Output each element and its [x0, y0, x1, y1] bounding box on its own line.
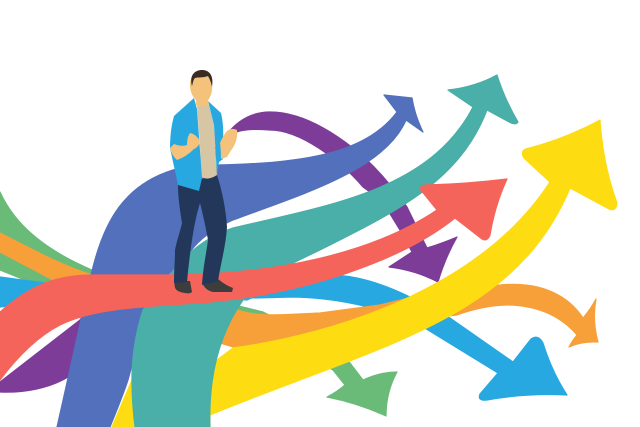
- person: [170, 70, 237, 293]
- head and neck: [190, 72, 212, 107]
- shirt: [170, 98, 223, 191]
- t-shirt: [197, 102, 217, 179]
- arrow: yellow: [112, 120, 617, 427]
- arrow: cyan: [0, 275, 567, 400]
- arrow: red: [0, 179, 507, 380]
- arrow: green: [0, 192, 397, 416]
- hair: [191, 70, 212, 87]
- left arm: [170, 133, 200, 160]
- trousers: [174, 175, 227, 285]
- arrow: teal: [132, 75, 518, 427]
- right arm: [220, 129, 237, 159]
- arrow: purple: [0, 112, 457, 392]
- arrow: blue: [57, 95, 423, 427]
- shoes: [174, 279, 233, 293]
- arrow: orange: [0, 233, 598, 348]
